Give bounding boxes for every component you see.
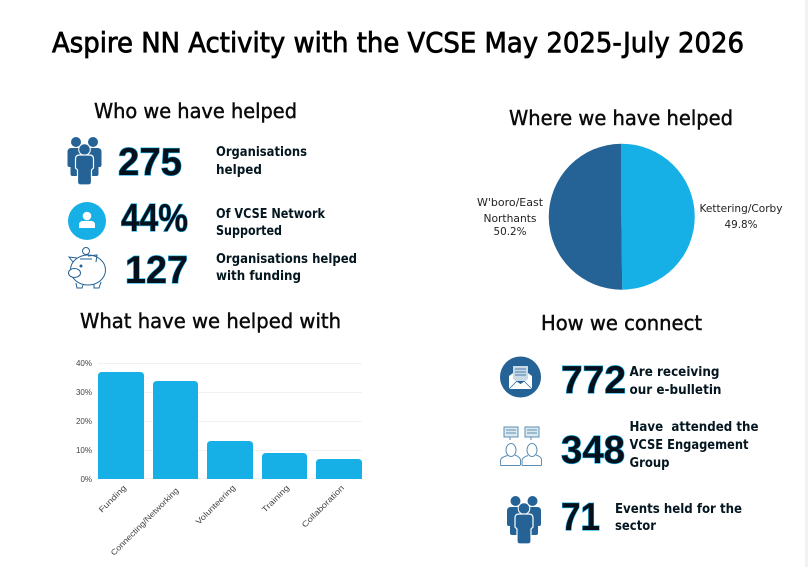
stat: 44%: 44% [121,197,188,240]
pie label: W'boro/East Northants: Northants [484,213,536,225]
label: events held for the sector: sector [615,519,657,534]
pie chart [549,144,695,290]
label: organisations helped: helped [216,163,262,178]
label: events held for the sector: Events held for the [615,502,742,517]
panel: what have we helped with [76,309,362,557]
title: Aspire NN Activity with the VCSE May 2025-July 2026 [52,26,744,59]
bar chart: Training [260,483,291,514]
pie label: Kettering/Corby: Kettering/Corby [700,203,782,215]
label: organisations helped with funding: with funding [216,269,301,284]
icon: two people with speech bubbles [500,427,542,466]
icon: people group [507,496,541,544]
label: have attended the VCSE engagement group: Have attended the [630,420,759,435]
label: of VCSE network supported: Supported [216,224,282,239]
bar chart: Funding [97,483,128,514]
label: of VCSE network supported: Of VCSE Network [216,207,325,222]
icon: piggy bank [68,248,106,288]
icon: envelope [500,356,541,398]
bar chart: 20% [76,417,92,426]
stat: 127: 127 [125,249,188,292]
bar chart: 30% [76,388,92,397]
bar chart: 10% [76,446,92,455]
icon: person in circle [68,202,106,240]
pie label: Kettering/Corby: 49.8% [724,219,758,231]
label: organisations helped with funding: Organisations helped [216,252,357,267]
heading: what have we helped with: What have we helped with [80,309,341,333]
bar chart: Collaboration [300,483,346,529]
bar chart: 40% [76,359,92,368]
label: are receiving our e-bulletin: Are receiving [630,365,720,380]
bar chart: Connecting/Networking [109,486,180,557]
stat: 275: 275 [118,141,182,184]
stat: 772: 772 [561,359,626,402]
stat: 348: 348 [561,429,625,472]
heading: how we connect: How we connect [541,311,702,335]
panel: where we have helped [477,106,782,290]
label: organisations helped: Organisations [216,145,307,160]
heading: where we have helped: Where we have helped [509,106,733,130]
label: are receiving our e-bulletin: our e-bulletin [630,383,722,398]
bar chart [76,359,362,557]
panel: how we connect [500,311,759,544]
label: have attended the VCSE engagement group: Group [630,456,670,471]
pie label: W'boro/East Northants: 50.2% [494,226,527,238]
bar chart: 0% [80,475,92,484]
panel: who we have helped [68,99,357,292]
stat: 71: 71 [561,496,600,539]
icon: people group [68,137,102,185]
bar chart: Volunteering [194,483,237,526]
pie label: W'boro/East Northants: W'boro/East [477,197,543,209]
heading: who we have helped: Who we have helped [94,99,297,123]
label: have attended the VCSE engagement group: VCSE Engagement [630,438,748,453]
